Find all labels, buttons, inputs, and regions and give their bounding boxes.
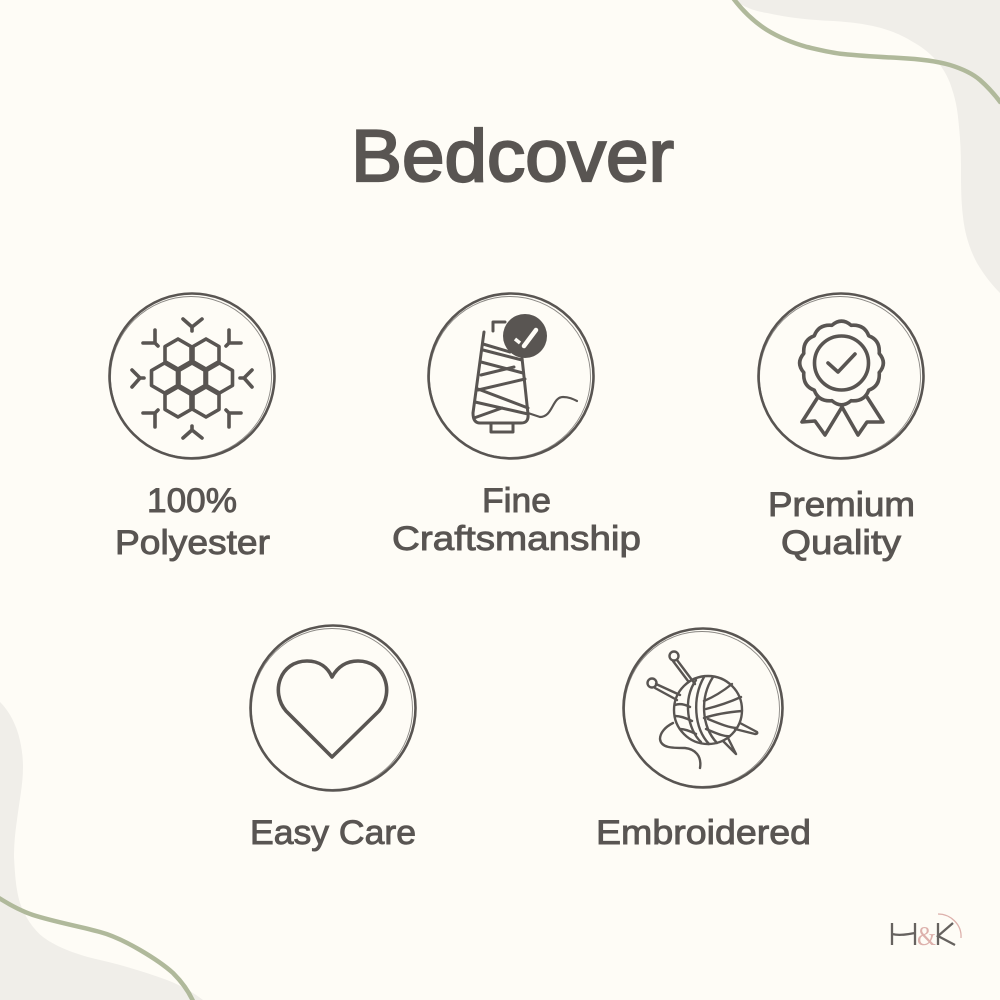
label: Fine Craftsmanship: Fine	[482, 482, 551, 520]
label: Premium Quality: Quality	[781, 524, 901, 562]
label: 100% Polyester	[115, 482, 270, 562]
label: Easy Care: Easy Care	[250, 814, 416, 852]
label: Fine Craftsmanship: Craftsmanship	[392, 520, 641, 558]
bottom left corner blob	[0, 702, 203, 1000]
label: Embroidered: Embroidered	[596, 814, 811, 852]
title: Bedcover	[351, 116, 674, 197]
top right green curve	[733, 0, 1000, 103]
label: Fine Craftsmanship	[392, 482, 641, 558]
icon: hexagon fabric in circle	[110, 294, 274, 458]
icon: thread spool with check badge	[428, 294, 594, 458]
item: Easy Care	[250, 626, 416, 852]
icon: heart	[250, 626, 416, 790]
logo: H&K	[892, 914, 961, 951]
label: 100% Polyester: Polyester	[115, 524, 270, 562]
item: Premium Quality	[758, 294, 924, 562]
label: Premium Quality	[768, 486, 915, 562]
item: Fine Craftsmanship	[392, 294, 641, 558]
bottom left green curve	[0, 898, 193, 1000]
item: Embroidered	[596, 628, 811, 852]
icon: rosette award	[758, 294, 924, 458]
item: 100% Polyester	[110, 294, 274, 562]
logo: H&K: &	[917, 921, 936, 951]
top right corner blob	[735, 0, 1000, 293]
icon: yarn ball with knitting needles	[624, 628, 782, 788]
label: Premium Quality: Premium	[768, 486, 915, 524]
label: 100% Polyester: 100%	[147, 482, 237, 520]
